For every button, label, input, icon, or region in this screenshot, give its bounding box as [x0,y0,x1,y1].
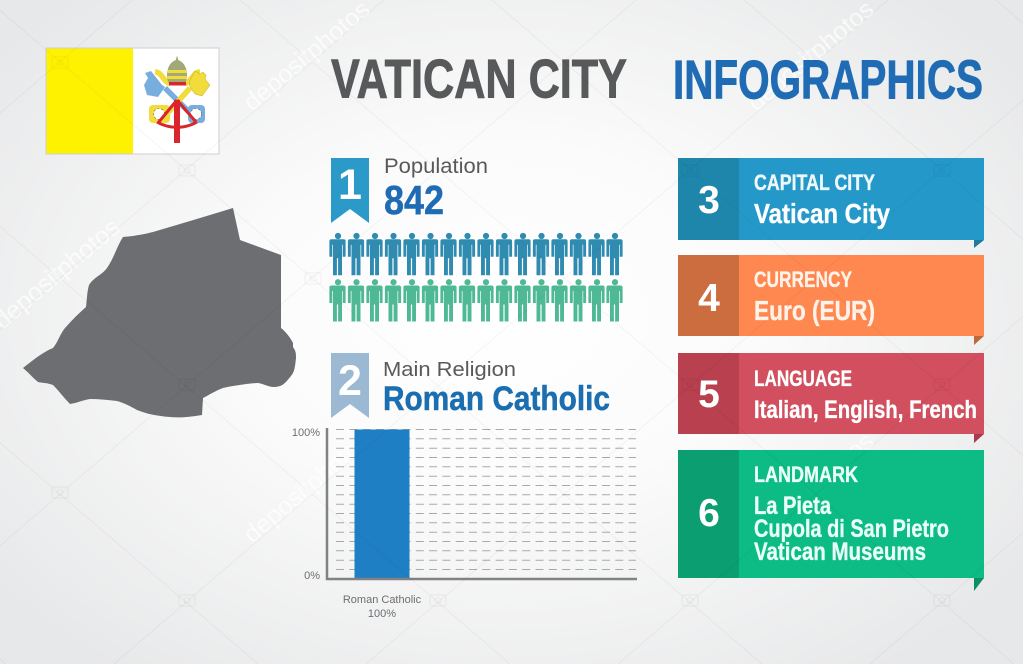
watermark: depositphotos [490,211,627,333]
flag of Vatican City [46,48,219,154]
bar label: Roman Catholic [343,594,422,606]
title: VATICAN CITY [331,48,627,110]
panel: landmark [678,450,984,591]
icon: ribbon 2: 2 [338,357,362,405]
panel: capital city: Vatican City [754,198,890,229]
icon: ribbon 1 [331,158,369,223]
panel: language: 5 [698,373,720,416]
axis label: 100%: 100% [292,427,320,439]
panel: currency: 4 [698,277,720,320]
panel: population [329,155,623,322]
bar label [343,594,422,620]
religion value: Roman Catholic [383,380,610,418]
icon: papal emblem [144,56,210,143]
panel: capital city: CAPITAL CITY [754,170,875,195]
panel: language: LANGUAGE [754,366,852,391]
panel: currency: CURRENCY [754,267,852,292]
panel: language [678,353,984,443]
axes [326,428,637,580]
bar chart [292,427,637,620]
panel: currency: Euro (EUR) [754,295,875,326]
pictogram row: blue people [329,233,623,275]
watermark: depositphotos [238,427,375,549]
panel: landmark: La Pieta [754,492,832,520]
religion label: Main Religion [383,358,516,381]
watermark [0,0,879,549]
bar: Roman Catholic [354,430,410,579]
panel: landmark: Vatican Museums [754,538,926,566]
population value: 842 [384,177,444,223]
panel: capital city [678,158,984,248]
pictogram row: green people [329,279,623,322]
panel: landmark: Cupola di San Pietro [754,515,949,543]
panel: capital city: 3 [698,179,720,222]
panel: main religion [292,353,637,620]
population label: Population [384,155,488,178]
panel: landmark: LANDMARK [754,462,858,487]
panel: language: Italian, English, French [754,396,977,424]
icon: ribbon 2 [331,353,369,418]
panel: currency [678,255,984,345]
map of Vatican City [23,208,296,417]
icon: ribbon 1: 1 [338,161,362,209]
panel: landmark: 6 [698,492,720,535]
bar label: 100% [368,608,396,620]
axis label: 0%: 0% [304,570,320,582]
watermark: depositphotos [742,427,879,549]
